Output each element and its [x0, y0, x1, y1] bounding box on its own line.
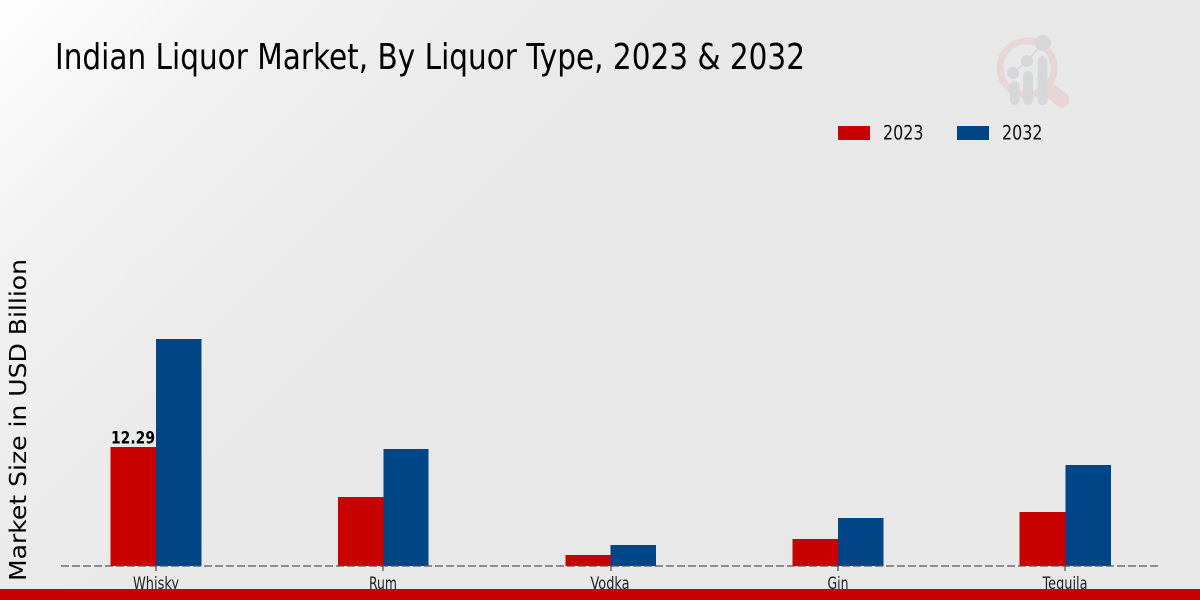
group: Tequila	[1020, 465, 1111, 566]
group: Gin	[792, 518, 884, 566]
x axis baseline	[61, 565, 1160, 567]
legend: 2032: 2032	[1002, 122, 1042, 144]
legend: 2032	[957, 122, 1042, 144]
legend: 2023: 2023	[883, 122, 924, 144]
y axis label: Market Size in USD Billion	[6, 259, 32, 581]
footer bar	[0, 589, 1200, 600]
value label: 12.29	[111, 428, 155, 448]
group: Rum	[338, 449, 428, 566]
legend: 2023	[838, 122, 924, 144]
icon: logo watermark	[1000, 35, 1062, 105]
x axis labels: Whisky	[133, 574, 179, 594]
title: Indian Liquor Market, By Liquor Type, 2023 & 2032	[55, 37, 805, 78]
x axis labels: Rum	[369, 574, 397, 594]
group: Whisky	[110, 339, 202, 566]
legend	[838, 122, 1042, 144]
bar chart	[110, 339, 1111, 566]
group: Vodka	[566, 545, 656, 566]
x axis labels: Tequila	[1042, 574, 1088, 594]
x axis labels	[133, 566, 1088, 594]
x axis labels: Vodka	[590, 574, 630, 594]
x axis labels: Gin	[828, 574, 848, 594]
